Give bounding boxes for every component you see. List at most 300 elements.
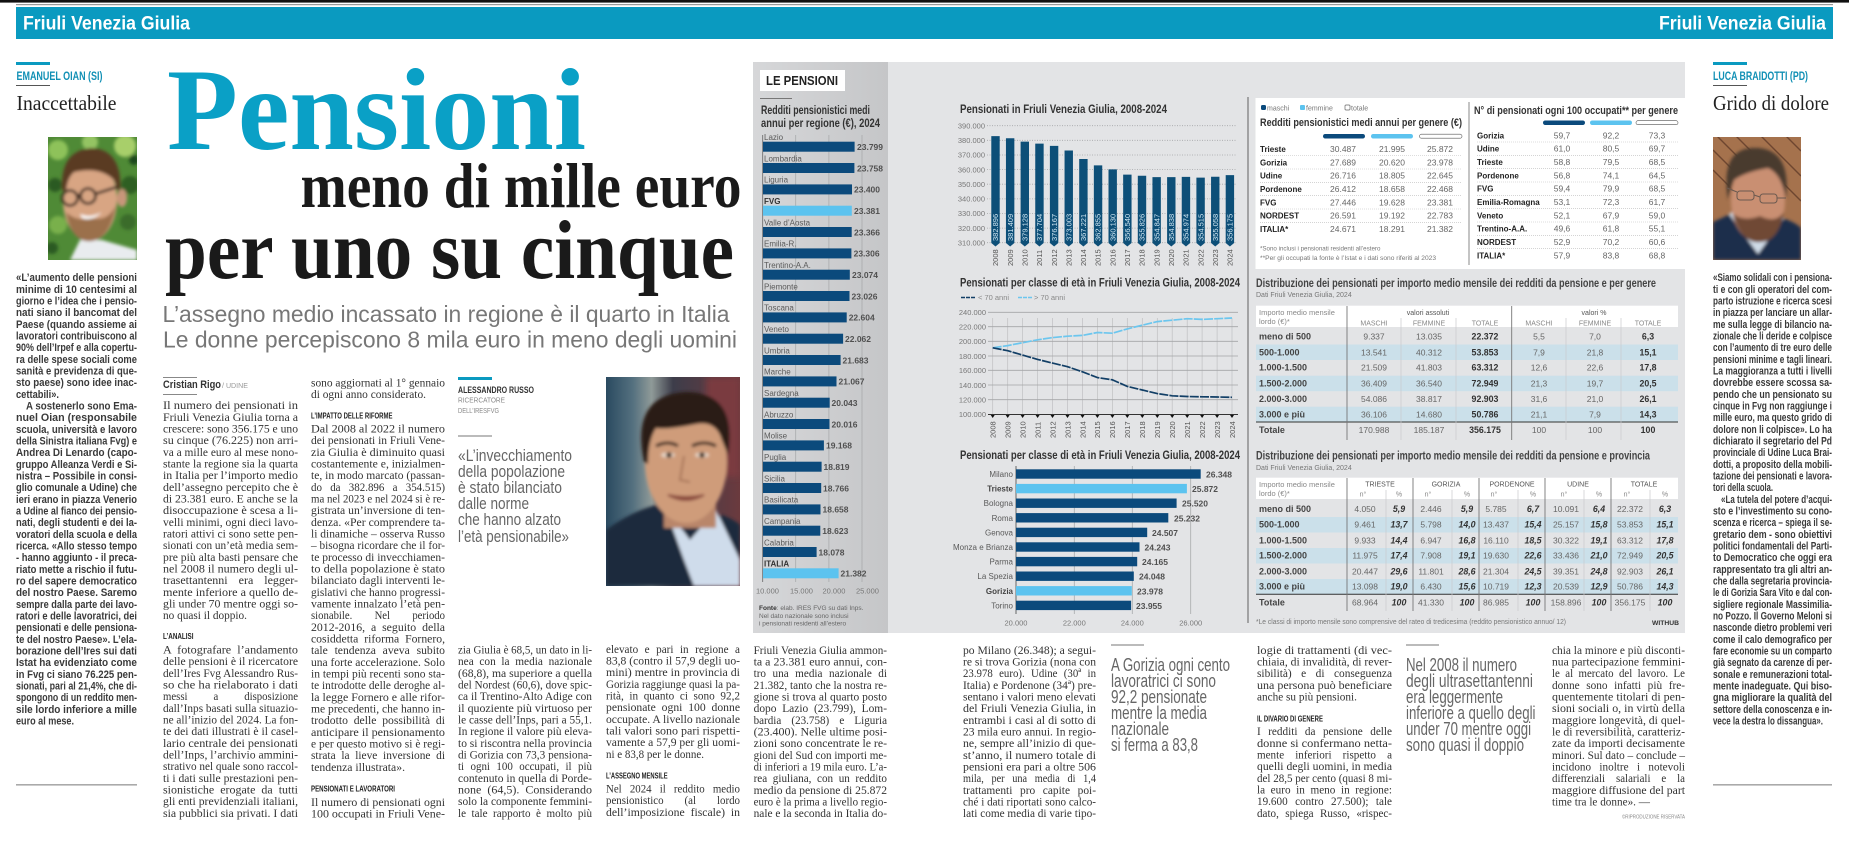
article column 3: none (64,5). Considerando <box>458 782 592 796</box>
table: distribuzione per provincia: 100 <box>1460 597 1474 607</box>
article column 2: cosiddetta riforma Fornero, <box>311 632 445 646</box>
chart: cities ranking bars: 25.520 <box>1182 499 1208 509</box>
chart: pensionati per classe di eta, line chart: 2016 <box>1108 421 1117 438</box>
chart: cities ranking bars: Torino <box>991 601 1014 610</box>
header band: Friuli Venezia Giulia <box>1659 14 1826 34</box>
table: distribuzione per genere: 7,9 <box>1533 347 1545 357</box>
table: distribuzione per genere: 6,3 <box>1642 332 1654 342</box>
sidebar text: riato mette a rischio il futu- <box>16 564 137 576</box>
table: distribuzione per provincia: 39.351 <box>1553 566 1579 576</box>
article column 1, second part: dell’Ires Fvg Alessandro Rus- <box>163 666 298 680</box>
interview box: Alessandro Russo: DELL’IRESFVG <box>458 406 499 415</box>
article column 2 <box>310 422 446 774</box>
article column 8: chia la minore e più disconti- <box>1552 643 1685 657</box>
article column 6: Italia) e Pordenone (34ª) pre- <box>963 678 1096 692</box>
chart: redditi pensionistici per regione: Lazio <box>764 133 784 142</box>
sidebar text: gruppo Alleanza Verdi e Si- <box>16 459 137 471</box>
table: pensionati ogni 100 occupati: 92,2 <box>1603 130 1620 140</box>
table: distribuzione per provincia: TOTALE <box>1631 482 1658 488</box>
table: pensionati ogni 100 occupati: 57,9 <box>1554 250 1571 260</box>
article column 3: le tale rapporto è molto più <box>458 806 592 820</box>
table: distribuzione per provincia: 16.110 <box>1483 535 1509 545</box>
table: distribuzione per provincia: 30.322 <box>1553 535 1579 545</box>
footnotes <box>1260 246 1437 262</box>
chart: pensionati in FVG 2008-2024: 2016 <box>1108 249 1117 266</box>
chart: redditi pensionistici per regione: 21.067 <box>838 377 865 387</box>
chart: redditi pensionistici per regione: 18.819 <box>824 462 850 472</box>
sidebar text: ro del sapere democratico <box>16 576 137 588</box>
chart: pensionati in FVG 2008-2024 <box>958 104 1237 266</box>
table: distribuzione per provincia: 17,4 <box>1390 551 1408 561</box>
article column 1, second part: sia pubblici sia privati. I dati <box>163 806 299 820</box>
article column 2: te processo di invecchiamen- <box>311 550 445 564</box>
table: distribuzione per provincia: 28,6 <box>1457 566 1476 576</box>
chart: pensionati in FVG 2008-2024: 2018 <box>1138 249 1147 266</box>
table: distribuzione per provincia: 100 <box>1526 597 1540 607</box>
table: distribuzione per provincia: 24,8 <box>1589 566 1608 576</box>
callout: Gorizia: si ferma a 83,8 <box>1111 735 1198 755</box>
table: redditi per genere: Trieste <box>1260 145 1286 154</box>
article column 6: sentano i valori meno elevati <box>963 689 1097 703</box>
chart: cities ranking bars: 23.955 <box>1136 601 1162 611</box>
table: distribuzione per provincia: 100 <box>1658 597 1672 607</box>
table: distribuzione per provincia: % <box>1464 492 1470 498</box>
chart: pensionati in FVG 2008-2024: 2014 <box>1079 249 1088 266</box>
table: distribuzione per genere: 2.000-3.000 <box>1259 394 1307 404</box>
article column 6: 23 mila euro annui. In regio- <box>963 724 1096 738</box>
chart: cities ranking bars: Genova <box>985 528 1014 537</box>
callout: ultrasettantenni <box>1406 644 1536 755</box>
table: distribuzione per provincia: 10.719 <box>1483 582 1509 592</box>
table: distribuzione per provincia: 9.461 <box>1354 520 1376 530</box>
subtitle <box>162 301 737 352</box>
sidebar text: spongono di un reddito men- <box>16 692 137 704</box>
sidebar text: «L’aumento delle pensioni <box>16 272 137 284</box>
table: pensionati ogni 100 occupati: FVG <box>1477 185 1493 194</box>
article column 1: nel 2008 il numero degli ul- <box>163 562 298 576</box>
article column 4, last lines: pensionistico (al lordo <box>606 793 740 807</box>
chart: pensionati in FVG 2008-2024: 370.000 <box>958 151 985 160</box>
chart: pensionati in FVG 2008-2024: 354.515 <box>1196 214 1205 241</box>
table: distribuzione per provincia: 9.933 <box>1354 535 1376 545</box>
chart: redditi pensionistici per regione: 25.000 <box>856 586 879 596</box>
article column 8 <box>1552 643 1686 808</box>
chart: redditi pensionistici per regione: 18.623 <box>822 526 849 536</box>
chart: cities ranking bars: Parma <box>989 558 1014 567</box>
table: distribuzione per provincia: 16,8 <box>1458 535 1476 545</box>
article column 5: di inferiori a 19 mila euro. L’a- <box>754 759 887 773</box>
table: distribuzione per provincia: 12,3 <box>1524 582 1542 592</box>
chart: redditi pensionistici per regione: 23.306 <box>854 249 880 259</box>
table: distribuzione per provincia: 15,1 <box>1656 520 1674 530</box>
chart: pensionati in FVG 2008-2024: 360.130 <box>1108 214 1117 241</box>
table: pensionati ogni 100 occupati: 59,0 <box>1649 210 1666 220</box>
table: pensionati ogni 100 occupati: 68,5 <box>1649 184 1666 194</box>
sidebar text: nuel Oian (responsabile <box>16 412 137 424</box>
chart: pensionati in FVG 2008-2024: 2011 <box>1035 250 1044 266</box>
chart: redditi pensionistici per regione: 23.799 <box>857 142 883 152</box>
table: distribuzione per provincia: 24,5 <box>1523 566 1542 576</box>
article column 5: Friuli Venezia Giulia ammon- <box>754 643 887 657</box>
section label: assegno mensile: L’ASSEGNO MENSILE <box>606 770 668 780</box>
callout: ultrasettantenni: Nel 2008 il numero <box>1406 655 1517 675</box>
table: distribuzione per provincia: 11.975 <box>1352 551 1378 561</box>
table: distribuzione per provincia: 6,7 <box>1527 504 1540 514</box>
article column 2: li dinamiche – osserva Russo <box>311 526 445 540</box>
article column 2: zia Giulia è diminuito quasi <box>311 445 446 459</box>
callout: Gorizia: nazionale <box>1111 719 1169 739</box>
sidebar text: Andrea Di Lenardo (capo- <box>16 447 137 459</box>
chart: pensionati in FVG 2008-2024: 2021 <box>1182 249 1191 266</box>
chart: redditi pensionistici per regione: 20.016 <box>832 419 858 429</box>
chart: cities ranking bars: Trieste <box>987 485 1014 494</box>
table: distribuzione per provincia: UDINE <box>1567 482 1589 488</box>
sidebar text: borazione dell’Ires sui dati <box>16 646 137 658</box>
table: distribuzione per genere: 72.949 <box>1472 378 1499 388</box>
article column 8: le di reversibilità, caratteriz- <box>1552 724 1685 738</box>
chart: redditi pensionistici per regione: Molise <box>764 432 788 441</box>
table: distribuzione per provincia: 12,9 <box>1590 582 1608 592</box>
callout: ultrasettantenni: degli ultrasettantenni <box>1406 671 1533 691</box>
article column 4, last lines: dell’imposizione fiscale) in <box>606 805 740 819</box>
pull quote: è stato bilanciato <box>458 478 562 497</box>
chart: redditi pensionistici per regione: Calabria <box>764 538 794 547</box>
sidebar text: glio comunale a Udine) che <box>16 482 137 494</box>
sidebar text: tori della scuola. <box>1713 482 1773 494</box>
table: redditi per genere: Gorizia <box>1260 158 1288 167</box>
table: pensionati ogni 100 occupati: Gorizia <box>1477 131 1505 140</box>
table: redditi per genere: 22.468 <box>1427 184 1453 194</box>
legend: femmine <box>1306 106 1333 112</box>
table: distribuzione per provincia: % <box>1396 492 1402 498</box>
article column 7 <box>1257 643 1393 703</box>
table: pensionati ogni 100 occupati: 69,7 <box>1649 144 1666 154</box>
pull quote <box>458 446 572 546</box>
table: pensionati ogni 100 occupati: 73,3 <box>1649 130 1666 140</box>
article column 3: le casse dell’Inps, pari a 55,1. <box>458 712 592 726</box>
table: pensionati ogni 100 occupati: 72,3 <box>1603 197 1620 207</box>
chart: cities ranking bars: Bologna <box>984 499 1014 508</box>
chart: redditi pensionistici per regione: 15.000 <box>790 586 813 596</box>
article column 8: maggiore longevità, di quel- <box>1552 713 1685 727</box>
table: redditi per genere: 19.628 <box>1379 197 1405 207</box>
chart: pensionati per classe di eta, line chart: 100.000 <box>959 410 986 419</box>
article column 2: gislativi che hanno progressi- <box>311 585 445 599</box>
chart: pensionati per classe di eta, line chart: 2022 <box>1198 421 1207 438</box>
chart: pensionati in FVG 2008-2024: 355.058 <box>1211 214 1220 241</box>
chart: pensionati in FVG 2008-2024: 390.000 <box>958 122 985 130</box>
chart: pensionati in FVG 2008-2024: 340.000 <box>958 195 985 204</box>
table: distribuzione per genere: TOTALE <box>1635 320 1662 328</box>
article column 7: anche su più pensioni. <box>1257 689 1357 703</box>
article column 2: e per questo motivo si è regi- <box>311 736 445 750</box>
chart: redditi pensionistici per regione <box>756 105 883 628</box>
table: pensionati ogni 100 occupati: 61,7 <box>1649 197 1666 207</box>
table: distribuzione per provincia: 17,8 <box>1656 535 1674 545</box>
table: distribuzione per genere: Importo medio mensile <box>1259 308 1335 317</box>
article column 4: ni e 83,8 per le donne. <box>606 747 704 761</box>
article column 6: ne, sempre all’inizio di que- <box>963 736 1096 750</box>
chart: pensionati per classe di eta, line chart: 160.000 <box>959 366 986 375</box>
chart: pensionati per classe di eta, line chart: 140.000 <box>959 381 986 390</box>
table: distribuzione per genere: valori % <box>1582 310 1606 317</box>
article column 6: entrambi i casi al di sotto di <box>963 713 1097 727</box>
chart: pensionati per classe di eta, line chart: 2021 <box>1183 421 1192 438</box>
author name: LUCA BRAIDOTTI (PD) <box>1713 71 1808 83</box>
chart: pensionati in FVG 2008-2024: 2013 <box>1064 249 1073 266</box>
chart: pensionati in FVG 2008-2024: 379.128 <box>1020 214 1030 241</box>
table: distribuzione per provincia: 72.949 <box>1617 551 1643 561</box>
article column 8: incidono inoltre i notevoli <box>1552 759 1686 773</box>
table: redditi per genere: Pordenone <box>1260 185 1302 194</box>
article column 5: bardia (23.758) e Liguria <box>754 713 888 727</box>
article column 1: ratori attivi ci sono sette pen- <box>163 527 298 541</box>
article column 1, second part: dell’Inps, l’archivio ammini- <box>163 748 298 762</box>
sidebar text: sile lordo inferiore a mille <box>16 704 137 716</box>
table: distribuzione per provincia: 6.947 <box>1420 535 1442 545</box>
article column 6: pensioni era pari a oltre 506 <box>963 759 1096 773</box>
chart: pensionati in FVG 2008-2024: 380.000 <box>958 136 985 145</box>
table: redditi per genere: NORDEST <box>1260 212 1299 221</box>
chart: pensionati per classe di eta, line chart: 2023 <box>1213 421 1222 438</box>
table: pensionati ogni 100 occupati: 56,8 <box>1554 170 1571 180</box>
table: distribuzione per genere: 41.803 <box>1416 363 1442 373</box>
chart: cities ranking bars: 26.000 <box>1179 618 1202 628</box>
article column 5: rea giuliana, con un reddito <box>754 771 887 785</box>
chart: cities ranking bars: 24.243 <box>1144 542 1171 552</box>
table: distribuzione per genere: 7,9 <box>1589 409 1601 419</box>
table: distribuzione per provincia: 5,9 <box>1393 504 1405 514</box>
table: distribuzione per genere: 17,8 <box>1639 363 1657 373</box>
chart: redditi pensionistici per regione: 22.062 <box>845 334 871 344</box>
table: distribuzione per provincia: meno di 500 <box>1259 504 1311 514</box>
table: distribuzione per genere: 21,0 <box>1587 394 1604 404</box>
chart: pensionati per classe di eta, line chart: 2020 <box>1168 421 1177 438</box>
sidebar text <box>16 272 138 728</box>
footnote and credit: *Le classi di importo mensile sono comprensive del rateo di tredicesima (reddito pensionistico annuo/ 12) <box>1256 619 1566 626</box>
table: distribuzione per genere: 9.337 <box>1363 332 1385 342</box>
article column 3: zia Giulia è 68,5, un dato in li- <box>458 642 592 656</box>
chart: redditi pensionistici per regione: Veneto <box>764 325 789 334</box>
article column 7, second part: mente inferiori rispetto a <box>1257 748 1393 762</box>
table: distribuzione per provincia: 13.437 <box>1483 520 1509 530</box>
article column 7, second part: del 28,5 per cento (quasi 8 mi- <box>1257 771 1392 785</box>
main title <box>165 46 742 297</box>
article column 7, second part: 19.600 contro 27.500); tale <box>1257 794 1392 808</box>
article column 7, second part: donne si confermano netta- <box>1257 736 1392 750</box>
article column 1: Il numero dei pensionati in <box>163 398 298 412</box>
table: distribuzione per genere: 63.312 <box>1472 363 1499 373</box>
article column 1: trasettantenni era legger- <box>163 573 298 587</box>
chart: pensionati in FVG 2008-2024: 2008 <box>991 249 1000 266</box>
footnotes: **Per gli occupati la fonte è l’Istat e i dati sono riferiti al 2023 <box>1260 255 1437 262</box>
section label: L'analisi: L’ANALISI <box>163 631 194 641</box>
chart: redditi pensionistici per regione: Trentino-A.A. <box>764 261 811 270</box>
article column 1: va a mille euro al mese nono- <box>163 445 298 459</box>
article column 5: dopo Lazio (23.799), Lom- <box>754 701 887 715</box>
callout: Gorizia: 92,2 pensionate <box>1111 687 1207 707</box>
sidebar text: euro al mese. <box>16 716 74 728</box>
chart: redditi pensionistici per regione: FVG <box>764 197 780 206</box>
table: redditi per genere: 18.658 <box>1379 184 1405 194</box>
article column 4: tali valori sono pari rispetti- <box>606 723 740 737</box>
table: redditi per genere: 21.382 <box>1427 224 1453 234</box>
article column 3: ca il Trentino-Alto Adige con <box>458 689 592 703</box>
table: pensionati ogni 100 occupati <box>1474 105 1678 260</box>
article column 7: chiaia, di invalidità, di rever- <box>1257 654 1392 668</box>
chart: cities ranking bars: Roma <box>992 514 1014 523</box>
copyright: ©RIPRODUZIONE RISERVATA <box>1622 814 1686 820</box>
table: distribuzione per genere: 500-1.000 <box>1259 347 1300 357</box>
table: redditi per genere: ITALIA* <box>1260 225 1289 234</box>
chart: pensionati in FVG 2008-2024: 355.826 <box>1138 214 1147 241</box>
table: redditi per genere: 26.716 <box>1330 171 1356 181</box>
table: redditi per genere: FVG <box>1260 198 1276 207</box>
table: distribuzione per genere: 21.509 <box>1361 363 1387 373</box>
article column 2: strata la lieve inversione di <box>311 748 446 762</box>
table: distribuzione per genere: Totale <box>1259 425 1285 435</box>
table: distribuzione per genere: MASCHI <box>1360 320 1388 328</box>
table: pensionati ogni 100 occupati: 55,1 <box>1649 224 1666 234</box>
article column 1, second part: ti i dati sulle prestazioni pen- <box>163 771 298 785</box>
article column 3: to si riscontra nella provincia <box>458 736 593 750</box>
table: distribuzione per provincia: 5,9 <box>1461 504 1473 514</box>
chart: pensionati in FVG 2008-2024: 362.855 <box>1094 214 1103 241</box>
article column 6: ché i dati riportati sono calco- <box>963 794 1096 808</box>
table: distribuzione per genere: 13.541 <box>1361 347 1387 357</box>
article column 8: differenziali salariali e la <box>1552 771 1686 785</box>
article column 2: gistrata un’inversione di ten- <box>311 503 445 517</box>
legend: > 70 anni <box>1034 293 1065 302</box>
chart: redditi pensionistici per regione: Valle d’Aosta <box>764 218 811 227</box>
chart: redditi pensionistici per regione: 23.366 <box>854 227 880 237</box>
article column 3 <box>458 642 593 820</box>
article column 5: nale e la seconda in Italia do- <box>754 806 887 820</box>
chart: pensionati in FVG 2008-2024: 381.409 <box>1006 214 1015 241</box>
table: distribuzione per provincia: % <box>1596 492 1602 498</box>
table: distribuzione per genere <box>1256 278 1678 440</box>
article column 3: In regione il valore più eleva- <box>458 724 592 738</box>
article column 2: tendenza illustrata». <box>311 760 405 774</box>
table: distribuzione per provincia: 50.786 <box>1617 582 1643 592</box>
table: pensionati ogni 100 occupati: 52,1 <box>1554 210 1571 220</box>
article column 1: su cinque (76.225) non arri- <box>163 433 298 447</box>
article column 2: trodotto delle possibilità di <box>311 713 446 727</box>
table: distribuzione per genere: 185.187 <box>1414 425 1445 435</box>
table: redditi per genere: 18.291 <box>1379 224 1405 234</box>
chart: redditi pensionistici per regione: 10.000 <box>756 586 779 596</box>
sidebar text: del nostro Paese. Saremo <box>16 587 137 599</box>
table: redditi per genere: 22.645 <box>1427 171 1453 181</box>
table: distribuzione per provincia: 100 <box>1392 597 1406 607</box>
table: distribuzione per provincia: 68.964 <box>1352 597 1378 607</box>
article column 7, second part: dato, spiega Russo, «rispec- <box>1257 806 1392 820</box>
chart: pensionati per classe di eta, line chart: 2024 <box>1228 421 1237 438</box>
table: pensionati ogni 100 occupati: 60,6 <box>1649 237 1666 247</box>
article column 6: mila, per una media di 1,4 <box>963 771 1096 785</box>
panel title <box>760 70 845 91</box>
table: distribuzione per provincia: 22,6 <box>1523 551 1542 561</box>
pull quote: che hanno alzato <box>458 510 561 529</box>
subtitle: Le donne percepiscono 8 mila euro in meno degli uomini <box>163 326 737 352</box>
chart: pensionati in FVG 2008-2024: 376.167 <box>1050 214 1059 241</box>
chart: pensionati per classe di eta, line chart: 2019 <box>1153 421 1162 438</box>
sidebar text: te del nostro Paese». L’ela- <box>16 634 137 646</box>
table: distribuzione per genere: FEMMINE <box>1579 320 1611 328</box>
sidebar text: 90% dell’Irpef e alla copertu- <box>16 342 137 354</box>
table: pensionati ogni 100 occupati: 80,5 <box>1603 144 1620 154</box>
chart: pensionati in FVG 2008-2024: 2015 <box>1094 249 1103 266</box>
pull quote: l’età pensionabile» <box>458 527 569 546</box>
table: pensionati ogni 100 occupati: NORDEST <box>1477 238 1516 247</box>
sidebar text: sempre dalla parte dei lavo- <box>16 599 137 611</box>
article column 2: sionabile. Nel periodo <box>311 608 445 622</box>
article column 1, second part: dall’Inps basati sulla situazio- <box>163 701 298 715</box>
article column 6 <box>963 643 1097 820</box>
chart: pensionati per classe di eta, line chart <box>959 278 1240 438</box>
table: distribuzione per provincia: 20,5 <box>1655 551 1674 561</box>
chart: cities ranking bars: 22.000 <box>1063 618 1086 628</box>
table: distribuzione per genere: 100 <box>1641 425 1655 435</box>
article column 3: ti ogni 100 occupati, il più <box>458 759 592 773</box>
article column 7, second part <box>1257 724 1393 820</box>
chart: pensionati in FVG 2008-2024: 2019 <box>1152 249 1161 266</box>
table: distribuzione per provincia: % <box>1530 492 1536 498</box>
article column 1, second part: so che ha rielaborato i dati <box>163 678 299 692</box>
article column 6: lati come media di varie tipo- <box>963 806 1096 820</box>
chart: pensionati per classe di eta, line chart: 120.000 <box>959 396 986 404</box>
table: distribuzione per genere: 14.680 <box>1416 409 1442 419</box>
table: distribuzione per provincia: 5.785 <box>1485 504 1507 514</box>
legend: maschi <box>1267 106 1290 112</box>
chart: pensionati in FVG 2008-2024: 373.003 <box>1064 214 1073 241</box>
article column 1, second part: messi a disposizione <box>163 689 298 703</box>
table: distribuzione per genere: 40.312 <box>1416 347 1442 357</box>
legend <box>1261 105 1368 112</box>
table: distribuzione per genere: TOTALE <box>1472 320 1499 328</box>
table: distribuzione per provincia: 6,4 <box>1593 504 1605 514</box>
footnotes: *Sono inclusi i pensionati residenti all’estero <box>1260 246 1381 252</box>
article column 2: costantemente e, inizialmen- <box>311 456 445 470</box>
table: distribuzione per provincia: 63.312 <box>1617 535 1643 545</box>
article column 2: tale tendenza aveva subito <box>311 643 445 657</box>
article column 1: velli minimi, ogni dieci lavo- <box>163 515 298 529</box>
chart: pensionati in FVG 2008-2024: 350.000 <box>958 180 985 189</box>
table: distribuzione per provincia: PORDENONE <box>1489 482 1535 488</box>
table: distribuzione per genere: 100 <box>1532 425 1546 435</box>
article column 1, second part: delle pensioni è il ricercatore <box>163 654 298 668</box>
article column 6: re si trova Gorizia (nona con <box>963 654 1096 668</box>
table: distribuzione per provincia: 15,6 <box>1458 582 1476 592</box>
article column 2: te, in modo marcato (passan- <box>311 468 445 482</box>
article column 1: mente inferiore a quello de- <box>163 585 298 599</box>
chart: pensionati in FVG 2008-2024: 356.175 <box>1226 214 1235 241</box>
table: distribuzione per provincia: 21,0 <box>1589 551 1608 561</box>
callout: Gorizia: lavoratrici ci sono <box>1111 671 1216 691</box>
photo: Emanuel Oian <box>46 134 139 260</box>
article column 5: 21.382, tanto che la nostra re- <box>754 678 887 692</box>
chart: pensionati in FVG 2008-2024: 2012 <box>1050 249 1059 266</box>
chart: pensionati per classe di eta, line chart: Pensionati per classe di età in Friuli Venezia Giulia, 2008-2024 <box>960 278 1240 290</box>
pull quote: della popolazione <box>458 462 565 481</box>
chart: pensionati in FVG 2008-2024: 2023 <box>1211 249 1220 266</box>
table: distribuzione per provincia: 19.630 <box>1483 551 1509 561</box>
sidebar text: sto paese) sono idee inac- <box>16 377 137 389</box>
chart: pensionati in FVG 2008-2024: 330.000 <box>958 209 985 218</box>
chart: pensionati in FVG 2008-2024: 310.000 <box>958 238 985 248</box>
table: distribuzione per genere: valori assoluti <box>1407 310 1450 317</box>
byline <box>163 377 248 395</box>
